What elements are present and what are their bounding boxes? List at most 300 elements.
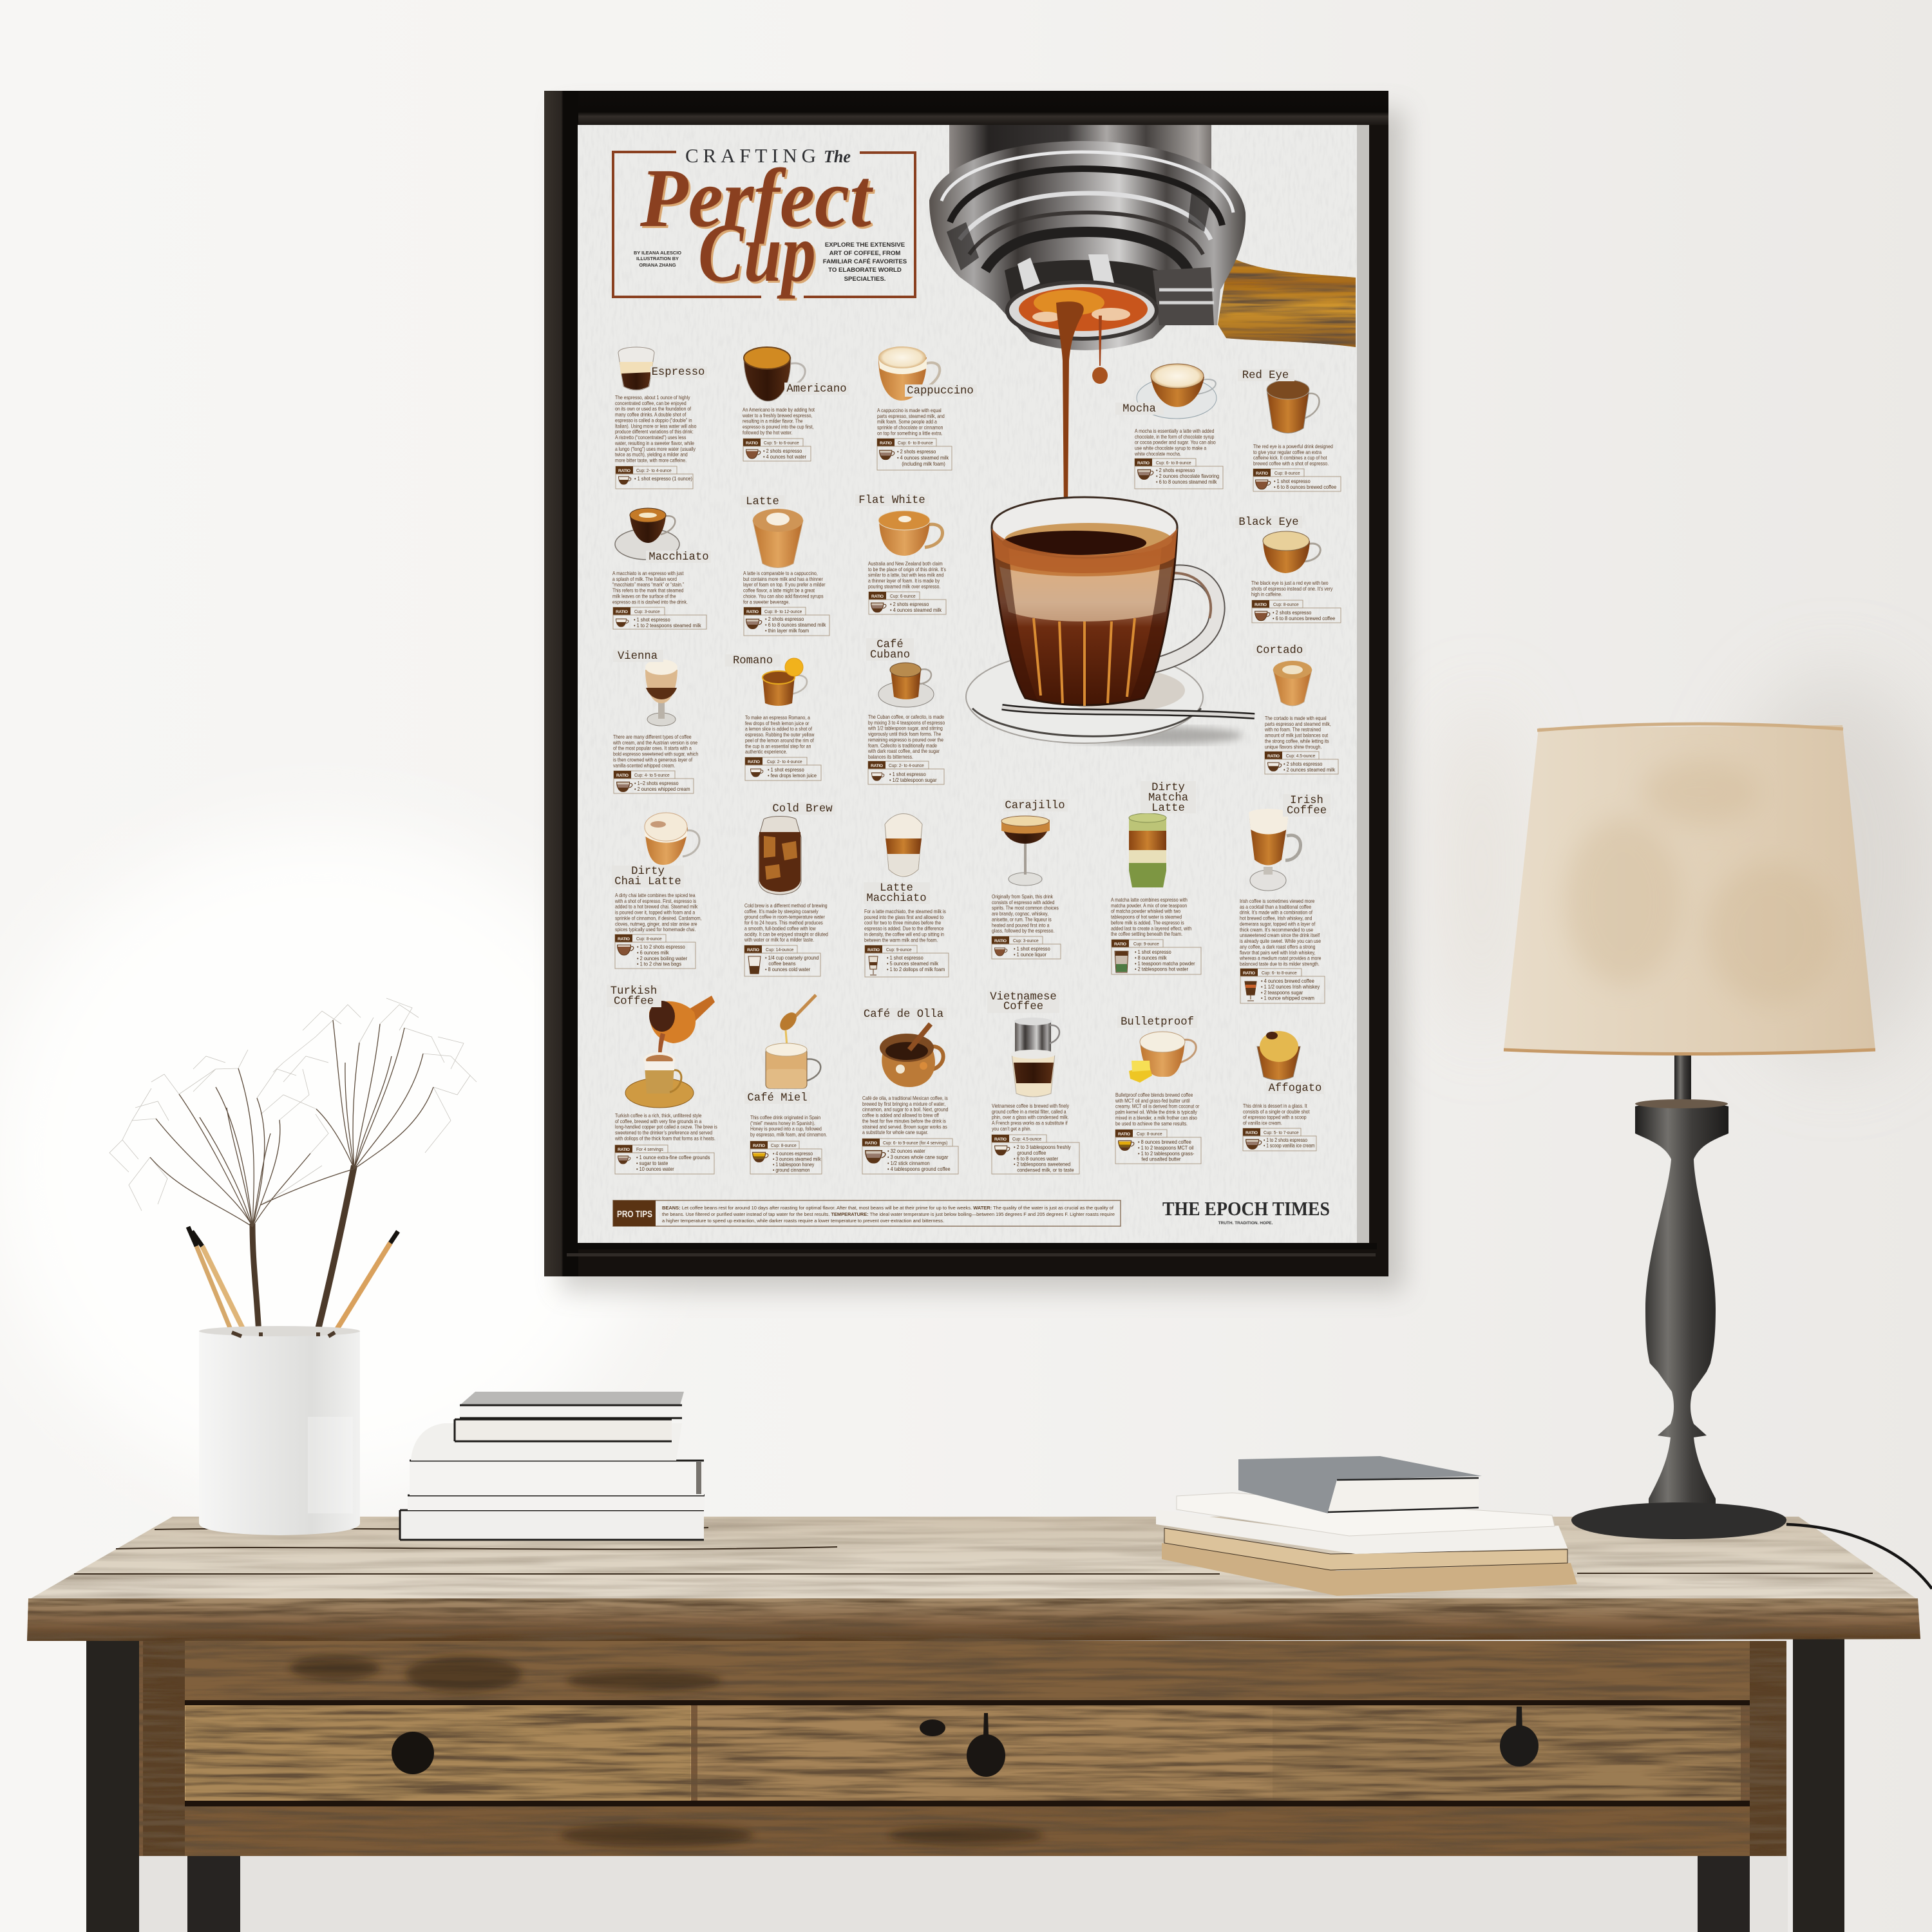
- knob center: [920, 1713, 1005, 1777]
- ratio: ground coffee: [1017, 1150, 1046, 1156]
- tan book upper: [1164, 1528, 1567, 1570]
- illustration: flat white mug: [878, 511, 943, 556]
- description: to be the place of origin of this drink. It’s: [868, 566, 946, 573]
- ratio: RATIO: [618, 469, 630, 473]
- ratio: • 6 to 8 ounces steamed milk: [1156, 479, 1217, 485]
- description: acidity. It can be enjoyed straight or diluted: [744, 931, 828, 937]
- description: a lungo (“long”) uses more water (usually: [615, 446, 696, 452]
- description: thick cream. It’s recommended to use: [1240, 927, 1313, 933]
- name: Vietnamese: [990, 991, 1057, 1003]
- name: [1141, 781, 1196, 815]
- description: concentrated coffee, can be enjoyed: [615, 400, 687, 406]
- name: Macchiato: [649, 551, 709, 564]
- name: Coffee: [1287, 805, 1327, 817]
- drink: Mocha: [1115, 364, 1223, 489]
- description: creamy. MCT oil is derived from coconut or: [1115, 1103, 1200, 1110]
- name: Irish: [1290, 795, 1323, 807]
- description: spices typically used for homemade chai.: [615, 927, 696, 933]
- brushes: [188, 1227, 398, 1332]
- top rail: [185, 1641, 1750, 1700]
- drink: Latte: [741, 495, 829, 636]
- description: many coffee drinks. A double shot of: [615, 412, 687, 418]
- drink: Cold Brew: [744, 802, 835, 976]
- ratio: [992, 936, 1061, 959]
- tan book lower: [1162, 1543, 1577, 1596]
- description: milk foam. Some people add a: [877, 419, 938, 425]
- description: A ristretto (“concentrated”) uses less: [615, 435, 687, 440]
- description: (“miel” means honey in Spanish).: [750, 1120, 815, 1126]
- ratio: RATIO: [871, 764, 883, 768]
- name: Romano: [733, 655, 773, 667]
- drink: Cafe de Olla: [860, 1008, 958, 1174]
- drink: Americano: [742, 347, 849, 461]
- name: Espresso: [652, 366, 705, 379]
- ratio: RATIO: [616, 773, 629, 778]
- drink: Cafe Miel: [744, 995, 827, 1174]
- name: Chai Latte: [614, 876, 681, 888]
- description: Turkish coffee is a rich, thick, unfiltered style: [615, 1112, 701, 1119]
- ratio: [750, 1141, 822, 1174]
- description: is then crowned with a generous layer of: [613, 757, 693, 763]
- title box border: [613, 152, 915, 297]
- description: produce different variations of this drink:: [615, 429, 694, 435]
- ratio: [992, 1135, 1079, 1174]
- ratio: [1253, 469, 1341, 491]
- ratio: Cup: 6- to 9-ounce (for 4 servings): [883, 1141, 948, 1146]
- ratio: [1115, 1130, 1201, 1164]
- name: Americano: [786, 383, 847, 395]
- intro text: EXPLORE THE EXTENSIVE: [825, 242, 905, 249]
- framed poster: [544, 91, 1388, 1276]
- name: Café Miel: [747, 1092, 808, 1104]
- drink: Vietnamese Coffee: [987, 990, 1079, 1174]
- description: chocolate, in the form of chocolate syrup: [1135, 433, 1214, 440]
- description: poured into the glass first and allowed to: [864, 914, 943, 920]
- hero illustration: glass cup and saucer: [966, 497, 1255, 744]
- description: added last to create a layered effect, with: [1111, 925, 1191, 931]
- description: Vietnamese coffee is brewed with finely: [992, 1103, 1069, 1109]
- ratio: RATIO: [1256, 471, 1268, 476]
- name: [987, 990, 1059, 1013]
- ratio: [869, 592, 946, 614]
- description: coffee is added and allowed to brew off: [862, 1112, 940, 1119]
- lamp shadow on wall: [1449, 676, 1932, 1063]
- pro tips text: the beans. Use filtered or purified water instead of tap water for the best results. TEMPERATURE: The ideal water temperature is just below boiling—between 195 degrees F and 205 degrees F. Lighter roasts require: [662, 1211, 1108, 1217]
- description: with MCT oil and grass-fed butter until: [1115, 1097, 1190, 1104]
- description: espresso. Rubbing the outer yellow: [745, 732, 815, 738]
- saucer: [966, 650, 1243, 744]
- cup body: [992, 497, 1177, 706]
- ratio: RATIO: [867, 948, 880, 952]
- description: coffee. It’s made by steeping coarsely: [744, 908, 819, 914]
- handle: [1218, 256, 1356, 347]
- ratio: • 4 tablespoons ground coffee: [887, 1166, 951, 1172]
- books stack left: [400, 1392, 705, 1540]
- ratio: Cup: 8-ounce: [636, 936, 662, 942]
- ratio: • 2 shots espresso: [1283, 761, 1323, 767]
- desk: [27, 1517, 1920, 1932]
- description: high in caffeine.: [1251, 591, 1282, 598]
- illustration: bulletproof cup with butter: [1129, 1032, 1196, 1083]
- apron: [139, 1641, 1786, 1856]
- ratio: RATIO: [994, 939, 1007, 943]
- ratio: Cup: 3-ounce: [1013, 938, 1039, 943]
- metal basket: [929, 141, 1245, 350]
- ratio: [744, 607, 829, 636]
- ratio: • 10 ounces water: [636, 1166, 674, 1172]
- ratio: • 2 ounces chocolate flavoring: [1156, 473, 1219, 479]
- illustration: black eye cup: [1263, 531, 1320, 573]
- bottom rail: [185, 1806, 1750, 1856]
- stiles: [143, 1641, 1786, 1856]
- description: of coffee, brewed with very fine grounds in a: [615, 1118, 702, 1124]
- description: few drops of fresh lemon juice or: [745, 720, 810, 726]
- ratio: • 6 to 8 ounces brewed coffee: [1274, 484, 1336, 490]
- illustration: irish coffee mug: [1249, 809, 1301, 891]
- description: brewed by first bringing a mixture of water,: [862, 1101, 945, 1107]
- description: parts espresso and steamed milk,: [1265, 721, 1331, 727]
- heading: crafting the: CRAFTING: [685, 144, 816, 167]
- description: before milk is added. The espresso is: [1111, 920, 1184, 926]
- ratio: • 2 teaspoons sugar: [1261, 989, 1303, 996]
- ratio: • 2 shots espresso: [1156, 468, 1195, 473]
- spoon: [1002, 707, 1255, 716]
- description: pouring steamed milk over espresso.: [868, 583, 940, 590]
- ratio: • 1 shot espresso: [887, 955, 923, 961]
- description: The espresso, about 1 ounce of highly: [615, 394, 690, 401]
- ratio: Cup: 4- to 5-ounce: [634, 773, 670, 778]
- description: are brandy, cognac, whiskey,: [992, 911, 1048, 917]
- description: on its own or used as the foundation of: [615, 406, 692, 412]
- intro text: FAMILIAR CAFÉ FAVORITES: [823, 258, 907, 265]
- illustration: red eye glass mug: [1267, 380, 1320, 433]
- description: on top for something a little extra.: [877, 430, 943, 437]
- ratio: • 4 ounces steamed milk: [890, 607, 942, 613]
- ratio: [868, 761, 944, 784]
- description: for 6 to 24 hours. This method produces: [744, 920, 823, 926]
- ratio: Cup: 4.5-ounce: [1286, 753, 1315, 759]
- ratio: • 1 shot espresso: [1014, 946, 1050, 952]
- name: Vienna: [618, 650, 658, 663]
- plant stems in vase: [109, 998, 477, 1334]
- hero illustration: portafilter: [929, 125, 1356, 515]
- illustration: cappuccino mug: [878, 346, 940, 401]
- description: A dirty chai latte combines the spiced tea: [615, 892, 696, 898]
- description: matcha powder. A mix of one teaspoon: [1111, 902, 1187, 909]
- ratio: Cup: 2- to 4-ounce: [889, 763, 924, 768]
- ratio: Cup: 9-ounce: [886, 947, 912, 952]
- ratio: Cup: 6-ounce: [890, 594, 916, 599]
- name: Cold Brew: [772, 803, 833, 815]
- ratio: Cup: 8-ounce: [1137, 1132, 1162, 1137]
- description: Originally from Spain, this drink: [992, 893, 1053, 900]
- description: tablespoons of hot water is steamed: [1111, 914, 1182, 920]
- ratio: Cup: 4.5-ounce: [1012, 1137, 1041, 1142]
- drawer left: [185, 1705, 691, 1801]
- soft light on wall around vase: [0, 824, 657, 1494]
- description: with cream, and the Austrian version is one: [612, 739, 697, 746]
- lamp cord: [1786, 1524, 1932, 1589]
- name: [1115, 402, 1164, 415]
- description: between the warm milk and the foam.: [864, 937, 938, 943]
- ratio: • 3 ounces whole cane sugar: [887, 1154, 949, 1160]
- description: The Cuban coffee, or cafecito, is made: [868, 714, 944, 720]
- coffee stream: [1056, 301, 1084, 515]
- drink: Vienna: [612, 650, 698, 793]
- description: the cup is an essential step for an: [745, 743, 811, 749]
- drink: Red Eye: [1238, 369, 1341, 491]
- description: strained and served. Brown sugar works as: [862, 1124, 947, 1130]
- description: the heat for five minutes before the drink is: [862, 1118, 946, 1124]
- pro tips text: BEANS: Let coffee beans rest for around 10 days after roasting for optimal flavor. After that, most beans will be at their prime for up to five weeks. WATER: The quality of the water is just as crucial as the quality of: [662, 1205, 1109, 1211]
- ratio: • 1 ounce whipped cream: [1261, 995, 1314, 1001]
- description: espresso is called a doppio (“double” in: [615, 417, 692, 424]
- ratio: • 8 ounces milk: [1135, 955, 1167, 961]
- ratio: • 1 shot espresso (1 ounce): [634, 476, 692, 482]
- name: Latte: [880, 882, 913, 895]
- wall below desk shading: [139, 1856, 1788, 1932]
- ratio: • 1 to 2 chai tea bags: [637, 961, 681, 967]
- ratio: RATIO: [747, 948, 759, 952]
- dark knots: [290, 1656, 1043, 1847]
- rail gaps: [185, 1700, 1750, 1806]
- illustration: mocha cup on saucer: [1137, 364, 1217, 419]
- name: Latte: [746, 496, 779, 508]
- name: Affogato: [1269, 1083, 1321, 1095]
- fifth book: [408, 1495, 705, 1510]
- ratio: coffee beans: [768, 961, 796, 967]
- ratio: • 1 to 2 shots espresso: [637, 944, 685, 950]
- heading: crafting the: The: [824, 147, 851, 166]
- description: for a sweeter beverage.: [743, 599, 790, 605]
- description: choice. You can also add flavored syrups: [743, 593, 824, 600]
- ratio: RATIO: [1245, 1131, 1258, 1135]
- description: bold espresso sweetened with sugar, which: [613, 751, 698, 757]
- name: Turkish: [611, 985, 657, 998]
- byline: ORIANA ZHANG: [639, 262, 676, 268]
- ratio: • 1 scoop vanilla ice cream: [1264, 1142, 1315, 1149]
- ratio: [1135, 459, 1223, 489]
- paper: [578, 125, 1357, 1243]
- description: vanilla-scented whipped cream.: [613, 762, 675, 768]
- ratio: Cup: 6- to 8-ounce: [898, 440, 933, 446]
- name: Coffee: [1003, 1001, 1043, 1013]
- illustration: coupe glass: [1001, 816, 1050, 886]
- logo: The Epoch Times: THE EPOCH TIMES: [1162, 1197, 1330, 1220]
- description: a substitute for whole cane sugar.: [862, 1130, 928, 1135]
- ratio: Cup: 8-ounce: [771, 1143, 797, 1148]
- drink: Flat White: [855, 494, 946, 614]
- ratio: RATIO: [746, 441, 758, 446]
- name: Cubano: [870, 649, 910, 661]
- ratio: Cup: 2- to 4-ounce: [767, 759, 802, 764]
- byline: ILLUSTRATION BY: [636, 256, 679, 261]
- drink: Cafe Cubano: [866, 638, 945, 784]
- description: A French press works as a substitute if: [992, 1120, 1068, 1126]
- ratio: [613, 607, 706, 629]
- ratio: • 4 ounces steamed milk: [897, 455, 949, 461]
- description: white chocolate mocha.: [1134, 451, 1181, 457]
- ratio: RATIO: [865, 1141, 877, 1146]
- description: with a shot of espresso. First, espresso is: [614, 898, 696, 904]
- illustration: romano with lemon: [762, 658, 807, 706]
- ratio: RATIO: [1118, 1132, 1130, 1137]
- ratio: • 2 shots espresso: [765, 616, 804, 622]
- description: with dollops of the thick foam that forms as it heats.: [614, 1135, 715, 1142]
- ratio: RATIO: [880, 441, 892, 446]
- desk top surface: [31, 1517, 1916, 1598]
- description: Australia and New Zealand both claim: [868, 560, 943, 567]
- description: is already quite sweet. While you can use: [1240, 938, 1321, 944]
- description: or cocoa powder and sugar. You can also: [1135, 439, 1216, 446]
- name: Dirty: [631, 866, 665, 878]
- description: but contains more milk and has a thinner: [743, 576, 823, 582]
- ratio: • 1–2 shots espresso: [634, 781, 679, 786]
- name: Café de Olla: [864, 1009, 943, 1021]
- ratio: • sugar to taste: [636, 1160, 668, 1166]
- ratio: RATIO: [1114, 942, 1126, 947]
- description: cool for two to three minutes before the: [864, 920, 941, 926]
- description: The cortado is made with equal: [1265, 715, 1327, 721]
- description: A mocha is essentially a latte with added: [1135, 428, 1214, 434]
- ratio: • 2 shots espresso: [897, 449, 936, 455]
- ratio: Cup: 3-ounce: [634, 609, 660, 614]
- ratio: • 1 shot espresso: [1274, 478, 1311, 484]
- ratio: RATIO: [618, 937, 630, 942]
- drink: Turkish Coffee: [607, 985, 717, 1174]
- ratio: • 6 ounces milk: [637, 950, 669, 956]
- ratio: [877, 439, 952, 470]
- description: more bitter taste, with more caffeine.: [615, 457, 687, 464]
- byline: BY ILEANA ALESCIO: [634, 250, 681, 256]
- ratio: For 4 servings: [636, 1147, 663, 1152]
- illustration: phin filter over glass: [1010, 1018, 1059, 1097]
- grey book: [1238, 1456, 1482, 1513]
- ratio: [615, 934, 696, 969]
- second book: [455, 1419, 672, 1441]
- drink: Dirty Matcha Latte: [1111, 781, 1201, 974]
- description: A matcha latte combines espresso with: [1111, 896, 1188, 903]
- description: ground coffee in room-temperature water: [744, 914, 825, 920]
- ratio: • 1/2 stick cinnamon: [887, 1160, 930, 1166]
- description: brewed coffee with a shot of espresso.: [1253, 460, 1329, 467]
- ratio: RATIO: [994, 1137, 1007, 1142]
- logo: The Epoch Times: TRUTH. TRADITION. HOPE.: [1218, 1221, 1273, 1226]
- ratio: • thin layer milk foam: [765, 627, 809, 634]
- ratio: [865, 945, 949, 977]
- name: Cortado: [1256, 645, 1303, 657]
- drink: Espresso: [614, 347, 707, 489]
- drink: Latte Macchiato: [864, 814, 949, 977]
- description: sprinkle of chocolate or cinnamon: [877, 424, 943, 431]
- ratio: • 1 1/2 ounces Irish whiskey: [1261, 984, 1320, 990]
- ratio: • 2 shots espresso: [763, 448, 802, 454]
- description: any coffee, a dark roast offers a strong: [1240, 943, 1315, 950]
- name: Red Eye: [1242, 370, 1289, 382]
- description: Honey is poured into a cup, followed: [750, 1126, 822, 1132]
- name: Cappuccino: [907, 385, 974, 397]
- heading: perfect: Perfect: [641, 154, 876, 247]
- ratio: RATIO: [1137, 461, 1150, 466]
- description: There are many different types of coffee: [613, 734, 692, 740]
- ratio: Cup: 6- to 8-ounce: [1262, 971, 1297, 976]
- description: with no foam. The restrained: [1264, 726, 1321, 733]
- illustration: cold brew glass: [759, 817, 801, 895]
- description: espresso is poured into the cup first,: [743, 424, 813, 430]
- description: Cold brew is a different method of brewing: [744, 902, 828, 909]
- description: hot brewed coffee, Irish whiskey, and: [1240, 915, 1312, 922]
- drink: Romano: [725, 654, 821, 781]
- frame: [544, 91, 1388, 1276]
- description: of matcha powder whisked with two: [1111, 908, 1180, 914]
- name: [1283, 794, 1331, 817]
- description: parts espresso, steamed milk, and: [877, 413, 945, 419]
- description: similar to a latte, but with less milk and: [868, 572, 943, 578]
- heading: perfect: Perfect: [639, 152, 874, 245]
- coffee drip: [1092, 316, 1108, 384]
- name: [866, 638, 914, 661]
- drawer right: [1273, 1705, 1741, 1801]
- description: cinnamon, and sugar to a boil. Next, ground: [862, 1106, 948, 1113]
- ratio: • 1 shot espresso: [634, 617, 670, 623]
- fine twigs: [109, 998, 477, 1211]
- description: a smooth, full-bodied coffee with low: [744, 925, 816, 932]
- description: the strong coffee, while letting its: [1265, 738, 1329, 744]
- ratio: [745, 757, 821, 781]
- description: phin, over a glass with condensed milk.: [992, 1114, 1069, 1121]
- name: Dirty: [1151, 782, 1185, 794]
- description: espresso is added. Due to the difference: [864, 925, 943, 932]
- drink: Macchiato: [612, 508, 711, 629]
- ratio: Cup: 14-ounce: [766, 947, 793, 952]
- ratio: • 1 shot espresso: [1135, 949, 1171, 955]
- description: with 1/2 tablespoon sugar, and stirring: [867, 725, 943, 732]
- description: layer of foam on top. If you prefer a milder: [743, 582, 826, 588]
- illustration: macchiato cup on saucer: [615, 508, 679, 560]
- description: The black eye is just a red eye with two: [1251, 580, 1329, 586]
- ratio: RATIO: [616, 610, 628, 614]
- back legs: [187, 1848, 1750, 1932]
- ratio: Cup: 2- to 4-ounce: [636, 468, 672, 473]
- ratio: • 8 ounces cold water: [765, 966, 811, 972]
- description: demerara sugar, topped with a layer of: [1240, 921, 1316, 927]
- drink: Affogato: [1243, 1031, 1324, 1151]
- fourth book: [410, 1461, 704, 1495]
- intro text: TO ELABORATE WORLD: [828, 267, 902, 274]
- description: For a latte macchiato, the steamed milk is: [864, 908, 946, 914]
- description: a lemon slice is added to a shot of: [745, 726, 813, 732]
- desk top cracks: [74, 1528, 1873, 1574]
- ratio: • 6 to 8 ounces steamed milk: [765, 622, 826, 628]
- table lamp: [1504, 724, 1932, 1589]
- description: be used to achieve the same results.: [1115, 1121, 1188, 1126]
- description: To make an espresso Romano, a: [745, 714, 811, 721]
- description: balances its bitterness.: [868, 754, 913, 760]
- description: you can’t get a phin.: [992, 1126, 1032, 1132]
- ratio: • 2 shots espresso: [890, 601, 929, 607]
- name: [612, 866, 684, 888]
- ratio: [614, 771, 694, 793]
- ratio: [862, 1139, 958, 1174]
- description: remaining espresso is poured over the: [868, 737, 943, 743]
- description: in density, the coffee will end up sitting in: [864, 931, 944, 938]
- description: balanced taste due to its milder strength.: [1240, 961, 1320, 967]
- ratio: • 2 ounces whipped cream: [634, 786, 690, 792]
- drink: Irish Coffee: [1239, 794, 1331, 1003]
- description: consists of a single or double shot: [1243, 1108, 1310, 1115]
- knob left: [392, 1732, 434, 1774]
- description: A latte is comparable to a cappuccino,: [743, 570, 818, 576]
